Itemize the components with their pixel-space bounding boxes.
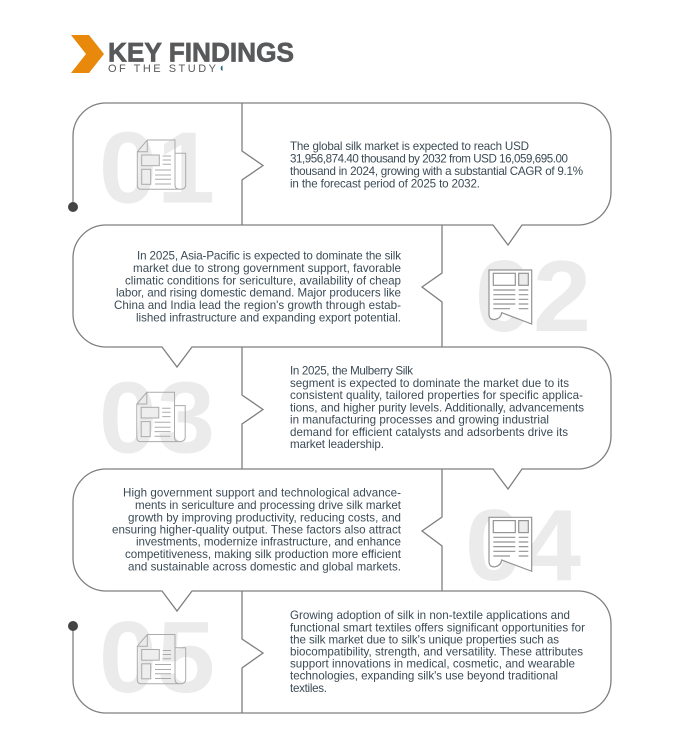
icon: orange chevron arrow <box>71 35 104 73</box>
text block: in manufacturing processes and growing industrial <box>290 414 549 427</box>
divider with chevron <box>422 225 442 347</box>
text block <box>112 487 402 573</box>
text block: tions, and higher purity levels. Additionally, advancements <box>290 401 584 414</box>
text block: the silk market due to silk's unique properties such as <box>290 634 559 647</box>
text block: support innovations in medical, cosmetic, and wearable <box>290 658 575 671</box>
number 04: 04 <box>465 490 581 602</box>
text block: segment is expected to dominate the market due to its <box>290 377 569 390</box>
text block: market due to strong government support, favorable <box>133 262 401 275</box>
text block <box>290 609 585 695</box>
icon: curled page <box>489 517 532 571</box>
text block: market leadership. <box>290 438 384 451</box>
text block: In 2025, Asia-Pacific is expected to dominate the silk <box>137 250 401 263</box>
title: KEY FINDINGS <box>108 38 294 68</box>
text block: Growing adoption of silk in non-textile applications and <box>290 609 570 622</box>
panel outline <box>73 225 578 367</box>
text block: and sustainable across domestic and global markets. <box>128 560 401 573</box>
panel outline <box>73 469 578 611</box>
text block: 31,956,874.40 thousand by 2032 from USD 16,059,695.00 <box>290 152 568 165</box>
text block: functional smart textiles offers significant opportunities for <box>290 621 585 634</box>
text block: technologies, expanding silk's use beyond traditional <box>290 670 558 683</box>
text block: lished infrastructure and expanding export potential. <box>136 311 401 324</box>
panel outline with connector <box>73 591 611 713</box>
number 03: 03 <box>99 362 215 474</box>
number 02: 02 <box>475 241 591 353</box>
number 01: 01 <box>99 112 215 224</box>
panel: 01 market size <box>68 103 611 245</box>
divider with chevron <box>422 469 442 591</box>
divider with chevron <box>242 591 263 713</box>
text block: demand for efficient catalysts and adsorbents drive its <box>290 426 568 439</box>
text block: investments, modernize infrastructure, and enhance <box>136 536 401 549</box>
text block <box>290 140 583 190</box>
icon: curled page <box>489 270 532 324</box>
icon: small blue half dot <box>221 66 222 71</box>
text block: consistent quality, tailored properties for specific applica- <box>290 389 583 402</box>
text block <box>114 250 401 324</box>
text block: High government support and technological advance- <box>123 487 401 500</box>
text block: In 2025, the Mulberry Silk <box>290 365 413 378</box>
text block: labor, and rising domestic demand. Major producers like <box>116 287 401 300</box>
text block: ments in sericulture and processing drive silk market <box>135 499 402 512</box>
panel: 05 non-textile applications <box>68 591 611 714</box>
icon: newspaper <box>137 140 186 189</box>
text block: ensuring higher-quality output. These factors also attract <box>112 523 402 536</box>
text block: thousand in 2024, growing with a substantial CAGR of 9.1% <box>290 165 583 178</box>
divider with chevron <box>242 103 263 225</box>
icon: newspaper <box>137 392 185 442</box>
text block: China and India lead the region's growth through estab- <box>114 299 401 312</box>
subtitle: OF THE STUDY <box>108 63 217 75</box>
text block: growth by improving productivity, reducing costs, and <box>128 511 401 524</box>
panel: 03 mulberry silk <box>99 347 611 489</box>
text block: climatic conditions for sericulture, availability of cheap <box>125 274 401 287</box>
panel: 02 regional dominance <box>73 225 591 367</box>
text block: The global silk market is expected to reach USD <box>290 140 529 153</box>
text block <box>290 365 584 451</box>
icon: newspaper <box>137 634 186 684</box>
panel: 04 government support <box>73 469 581 611</box>
text block: biocompatibility, strength, and versatility. These attributes <box>290 646 583 659</box>
panel outline with connector <box>73 103 611 245</box>
text block: competitiveness, making silk production more efficient <box>125 548 402 561</box>
connector dot <box>68 202 78 212</box>
text block: textiles. <box>290 682 327 695</box>
connector dot <box>68 621 78 631</box>
panel outline <box>106 347 611 489</box>
divider with chevron <box>242 347 263 469</box>
number 05: 05 <box>99 602 215 714</box>
header: key findings of the study <box>71 35 294 75</box>
text block: in the forecast period of 2025 to 2032. <box>290 177 480 190</box>
